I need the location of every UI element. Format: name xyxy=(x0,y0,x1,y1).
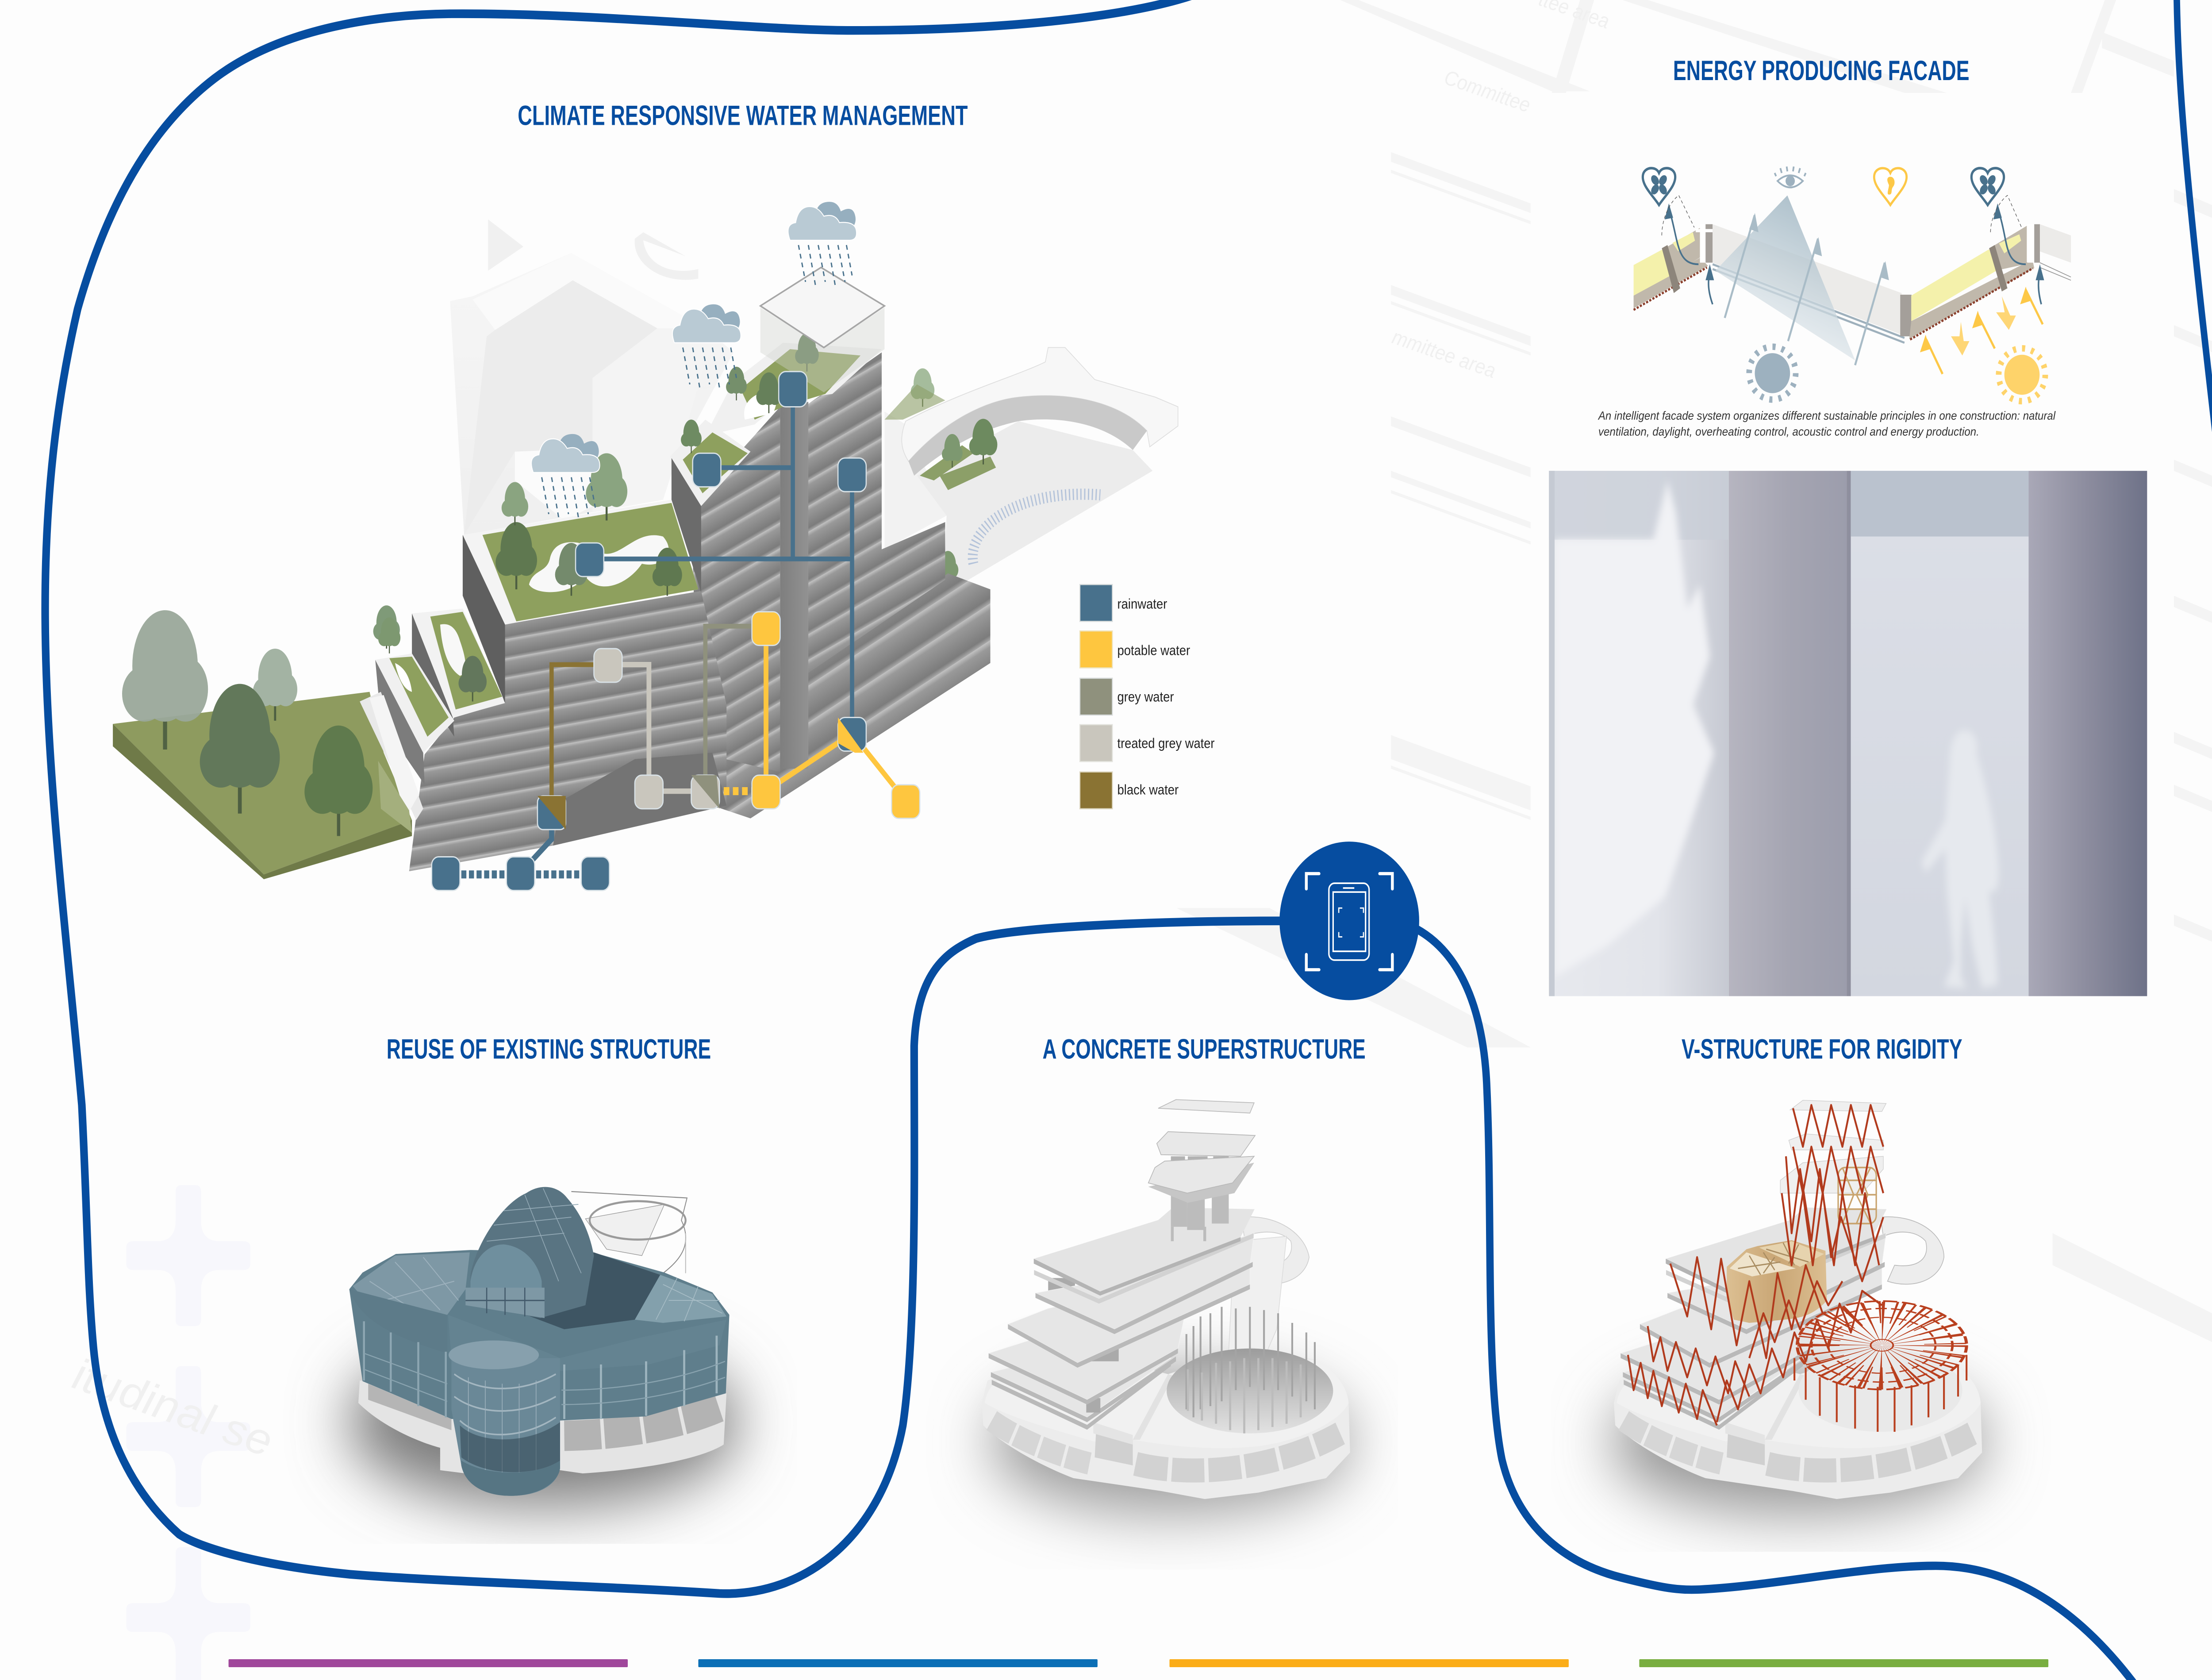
panel: energy facade cover xyxy=(1531,93,2174,1054)
blue outline: top right xyxy=(2177,0,2212,440)
panel: v-structure model xyxy=(1608,1100,1989,1512)
panel: concrete superstructure model xyxy=(982,1099,1354,1512)
legend: treated grey water: treated grey water xyxy=(1118,736,1215,751)
tower slabs xyxy=(1780,1100,1886,1193)
facade caption: An intelligent facade system organizes different sustainable principles in one construction: natural xyxy=(1598,409,2056,423)
ghost label: committee area left: mmittee area xyxy=(1390,325,1498,383)
legend: black water xyxy=(1080,772,1179,809)
plaza and canopy xyxy=(884,347,1178,589)
main left body xyxy=(409,591,726,871)
tan timber drum xyxy=(1727,1240,1827,1323)
panel: dark concrete column xyxy=(2028,471,2147,996)
title: v-structure for rigidity: V-STRUCTURE FOR RIGIDITY xyxy=(1682,1033,1962,1065)
wall: right section xyxy=(1909,224,2071,339)
red zigzag bracing xyxy=(1628,1105,1883,1425)
cast shadow xyxy=(987,1371,1354,1512)
daylight arrows xyxy=(1725,213,1889,365)
legend: potable water xyxy=(1080,631,1190,668)
tower face right xyxy=(804,352,945,676)
rear core block xyxy=(1227,1236,1286,1377)
icon: eye xyxy=(1774,166,1806,187)
plaza disc xyxy=(1799,1349,1962,1432)
central shaft xyxy=(780,402,808,769)
title: a concrete superstructure: A CONCRETE SUPERSTRUCTURE xyxy=(1043,1033,1366,1065)
base and slabs xyxy=(1614,1207,1982,1499)
terrain with trees xyxy=(113,605,412,879)
icon: fan heart right xyxy=(1971,168,2004,205)
white wireframe roof xyxy=(571,1192,687,1273)
left body lower void xyxy=(553,753,726,846)
icon: fan heart left xyxy=(1643,168,1675,205)
title: energy producing facade: ENERGY PRODUCING FACADE xyxy=(1673,55,1970,86)
lower right block xyxy=(712,573,991,819)
cylindrical stair tower xyxy=(449,1341,560,1496)
legend: potable water: potable water xyxy=(1118,643,1190,658)
red radial roof structure xyxy=(1797,1301,1966,1389)
cast shadow xyxy=(346,1339,741,1505)
top roof slab xyxy=(1158,1099,1254,1113)
cast shadow xyxy=(1608,1371,1989,1512)
tower columns lower xyxy=(1171,1192,1229,1241)
red vertical legs xyxy=(1794,1355,1966,1432)
eye cone of daylight xyxy=(1716,196,1855,360)
white base floor xyxy=(358,1380,726,1473)
panel: water management axonometric xyxy=(113,202,1178,891)
tower slab three xyxy=(1148,1156,1254,1203)
legend: rainwater xyxy=(1080,584,1167,621)
energy arrows and lightning xyxy=(1920,287,2043,374)
color bar: orange xyxy=(1169,1659,1569,1667)
legend: black water: black water xyxy=(1118,782,1179,798)
blue outline: left panel xyxy=(45,0,1284,1594)
nodes xyxy=(432,372,920,891)
facade diagram xyxy=(1634,166,2071,401)
icon: ear heart xyxy=(1874,168,1907,205)
tower columns upper xyxy=(1171,1156,1229,1176)
glass: central section xyxy=(1713,224,1912,343)
QR scan badge xyxy=(1279,842,1419,1000)
base and stacked slabs xyxy=(982,1207,1350,1499)
rain clouds xyxy=(531,202,856,517)
panel: glass with tree shadow xyxy=(1549,471,1729,996)
title: climate responsive water management: CLIMATE RESPONSIVE WATER MANAGEMENT xyxy=(518,100,968,131)
roof gardens xyxy=(360,333,882,833)
decorative plus signs xyxy=(126,1185,250,1680)
circular plaza with columns xyxy=(1167,1307,1333,1434)
icon: yellow sun xyxy=(1999,348,2045,401)
wall: left section xyxy=(1634,224,1713,310)
color bar: green xyxy=(1639,1659,2048,1667)
legend: grey water: grey water xyxy=(1118,689,1174,705)
panel: glass with figure xyxy=(1847,471,2028,996)
facade photo xyxy=(1549,471,2147,996)
faint plan background xyxy=(1176,0,2212,1342)
tower canopy xyxy=(760,267,884,392)
white wireframe rear xyxy=(1241,1217,1309,1284)
legend xyxy=(1080,584,1215,809)
tower slab two xyxy=(1157,1132,1255,1156)
title: reuse of existing structure: REUSE OF EXISTING STRUCTURE xyxy=(387,1033,711,1065)
timber lattice core xyxy=(1838,1168,1876,1223)
ventilation arrows xyxy=(1662,196,2044,304)
blue outline: right panel xyxy=(1417,929,2139,1680)
blue translucent envelope xyxy=(349,1187,730,1421)
legend: grey water xyxy=(1080,678,1174,715)
legend: treated grey water xyxy=(1080,725,1215,761)
color bar: purple xyxy=(229,1659,628,1667)
ghost label: committee: Committee xyxy=(1442,66,1532,117)
tower face left xyxy=(691,407,780,772)
icon: blue sun xyxy=(1749,347,1796,400)
white wireframe rear xyxy=(1881,1217,1944,1284)
facade caption: ventilation, daylight, overheating control, acoustic control and energy production. xyxy=(1598,425,1979,438)
ghost label: longitudinal section: itudinal se xyxy=(68,1349,277,1467)
context: ghost buildings xyxy=(450,219,733,535)
color bar: blue xyxy=(698,1659,1098,1667)
pipes xyxy=(461,400,906,874)
legend: rainwater: rainwater xyxy=(1118,596,1167,612)
panel: concrete column xyxy=(1729,471,1847,996)
panel: existing structure model xyxy=(346,1187,741,1505)
